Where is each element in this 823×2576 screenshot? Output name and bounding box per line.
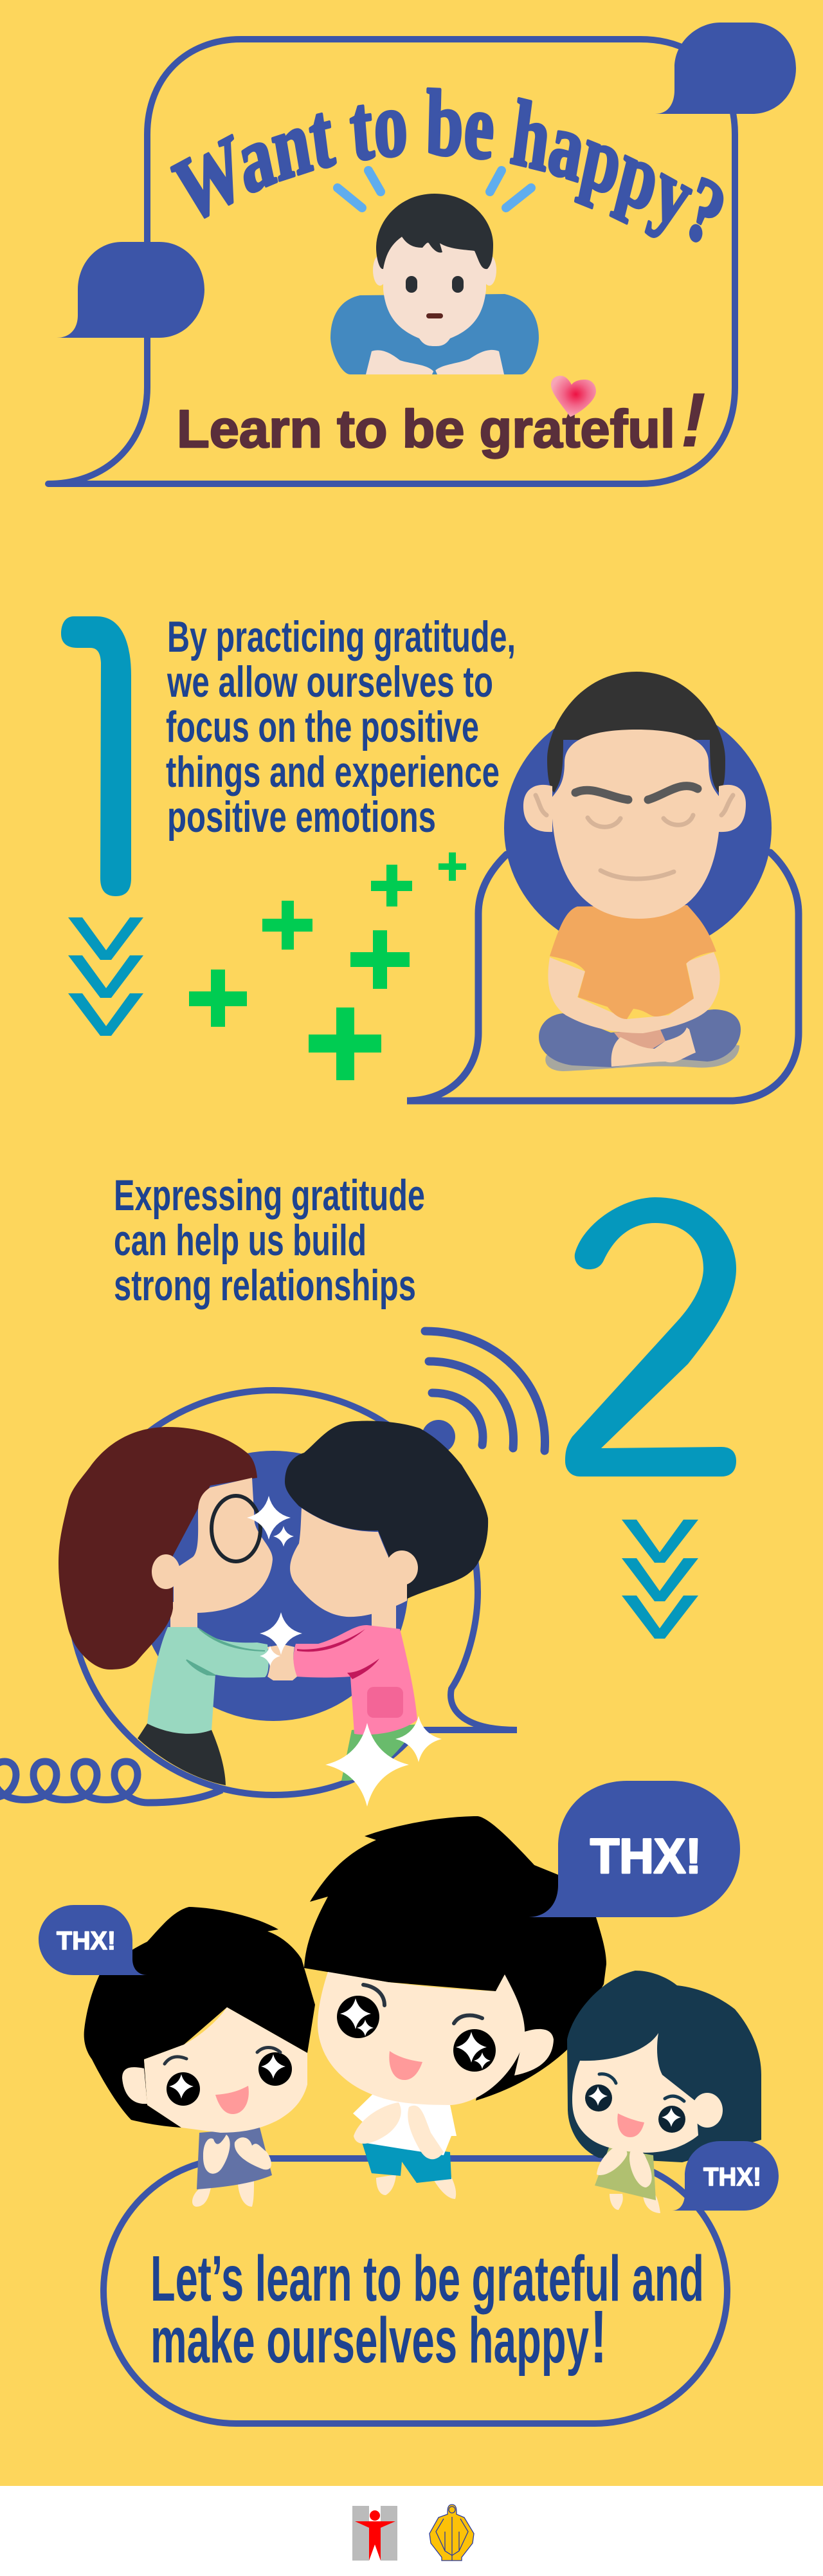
- shorts: [614, 1028, 665, 1049]
- text block: expressing gratitude: Expressing gratitude: [114, 1171, 425, 1220]
- hands: [203, 2135, 271, 2174]
- speech bubble: right THX: THX!: [703, 2163, 761, 2191]
- mint sweater: [147, 1627, 269, 1734]
- mouth: [426, 313, 443, 318]
- speech bubble: big THX: THX!: [590, 1829, 701, 1884]
- hair: [376, 194, 493, 269]
- green trousers: [341, 1724, 418, 1781]
- hands: [354, 2102, 444, 2159]
- legs: [376, 2175, 456, 2199]
- logo: red figure: [352, 2506, 397, 2561]
- text block: expressing gratitude: can help us build: [114, 1216, 366, 1265]
- pocket: [367, 1687, 403, 1718]
- face: [290, 1508, 407, 1617]
- hands: [597, 2148, 652, 2187]
- hair: [304, 1816, 606, 2101]
- hair: [285, 1421, 488, 1599]
- mouth: [617, 2113, 644, 2137]
- illustration: meditating man: [504, 672, 772, 1071]
- illustration: boy in pink: [267, 1421, 488, 1781]
- speech bubble: big THX: [527, 1781, 740, 1917]
- neck: [170, 1602, 197, 1631]
- ear: [122, 2067, 147, 2104]
- ear: [152, 1554, 180, 1589]
- icon: sparkles: [247, 1496, 442, 1807]
- eyes: [337, 1996, 379, 2038]
- blue dress: [197, 2128, 272, 2189]
- illustration: big boy in centre: [304, 1816, 606, 2199]
- fist: [267, 1644, 297, 1680]
- eyes: [585, 2084, 612, 2111]
- title: Want to be happy: Want to be happy?: [170, 87, 724, 243]
- text block: practicing gratitude: By practicing gratitude,: [167, 612, 516, 661]
- numeral: 1: [61, 616, 131, 896]
- blue shorts: [362, 2142, 451, 2183]
- ears: [523, 785, 552, 832]
- panel: meditation frame: [407, 852, 799, 1101]
- face: [144, 2007, 307, 2133]
- eyes: [406, 276, 417, 293]
- blue circle backdrop: [504, 701, 772, 955]
- text block: expressing gratitude: [114, 1171, 425, 1310]
- ears: [373, 255, 387, 286]
- logo: gold hands: [430, 2505, 474, 2561]
- text block: practicing gratitude: things and experience: [166, 748, 500, 796]
- icon: signal arcs: [422, 1331, 545, 1453]
- foot: [611, 1027, 696, 1067]
- legs: [610, 2194, 660, 2213]
- illustration: bowing boy: [330, 194, 539, 374]
- panel: round speech frame with coil: [0, 1390, 517, 1803]
- exclamation mark: !: [680, 377, 706, 463]
- eyebrows: [165, 2047, 280, 2064]
- numeral: 2: [565, 1197, 736, 1477]
- panel: header speech frame: [48, 23, 796, 484]
- mouth: [215, 2086, 249, 2114]
- closed eyes and mouth: [536, 795, 733, 879]
- speech bubble left: [57, 242, 204, 338]
- illustration: right girl: [567, 1971, 761, 2213]
- face: [552, 730, 720, 919]
- icon: surprise dashes: [338, 170, 531, 208]
- frame outline: [48, 39, 735, 484]
- mouth: [389, 2051, 422, 2080]
- blue shirt: [330, 294, 539, 374]
- closing message: [150, 2243, 704, 2378]
- hair: [547, 672, 725, 793]
- arrow: chevrons down section 2: [622, 1520, 698, 1639]
- face: [383, 232, 486, 346]
- eyebrows: [599, 2074, 684, 2101]
- legs: [192, 2181, 254, 2207]
- orange shirt: [550, 905, 716, 1019]
- text block: practicing gratitude: [166, 612, 516, 842]
- green dress: [595, 2148, 656, 2200]
- text block: practicing gratitude: focus on the positive: [166, 703, 479, 751]
- eyebrows: [575, 786, 698, 800]
- speech bubble: left THX: [39, 1905, 147, 1975]
- hair: [59, 1427, 257, 1670]
- panel: closing stadium frame: [104, 2158, 727, 2424]
- speech bubble: right THX: [672, 2141, 779, 2211]
- arms: [548, 952, 720, 1033]
- illustration: blue circle backdrop: [138, 1451, 408, 1721]
- pants: [138, 1724, 226, 1785]
- icon: green plus signs: [189, 852, 466, 1080]
- face: [318, 1972, 525, 2105]
- speech bubble: left THX: THX!: [57, 1927, 116, 1955]
- hands: [366, 350, 504, 374]
- footer band: [0, 2486, 823, 2576]
- ear: [692, 2093, 723, 2128]
- ear: [514, 2029, 554, 2075]
- hair: [84, 1907, 315, 2128]
- floor shadow: [545, 1042, 739, 1071]
- text block: expressing gratitude: strong relationships: [114, 1261, 416, 1310]
- subtitle: Learn to be grateful: Learn to be grateful: [177, 399, 675, 459]
- neck: [372, 1602, 396, 1631]
- white shirt: [353, 2088, 457, 2155]
- illustration: girl with glasses: [59, 1427, 273, 1785]
- glasses: [212, 1496, 260, 1561]
- crossed legs: [539, 1009, 741, 1067]
- hair: [567, 1971, 761, 2162]
- icon: watercolor heart: [551, 376, 596, 417]
- eyes: [167, 2072, 200, 2106]
- illustration: left boy: [84, 1907, 315, 2207]
- pink sweater: [293, 1625, 417, 1734]
- ear: [386, 1550, 418, 1585]
- eyebrows: [363, 1985, 482, 2023]
- text block: practicing gratitude: we allow ourselves to: [167, 658, 493, 706]
- arrow: chevrons down section 1: [68, 917, 143, 1036]
- speech bubble top right: [655, 23, 796, 114]
- face: [174, 1478, 273, 1613]
- closing message: make ourselves happy: [150, 2305, 589, 2377]
- face: [572, 2033, 698, 2153]
- closing message: !: [590, 2295, 607, 2378]
- text block: practicing gratitude: positive emotions: [167, 793, 436, 842]
